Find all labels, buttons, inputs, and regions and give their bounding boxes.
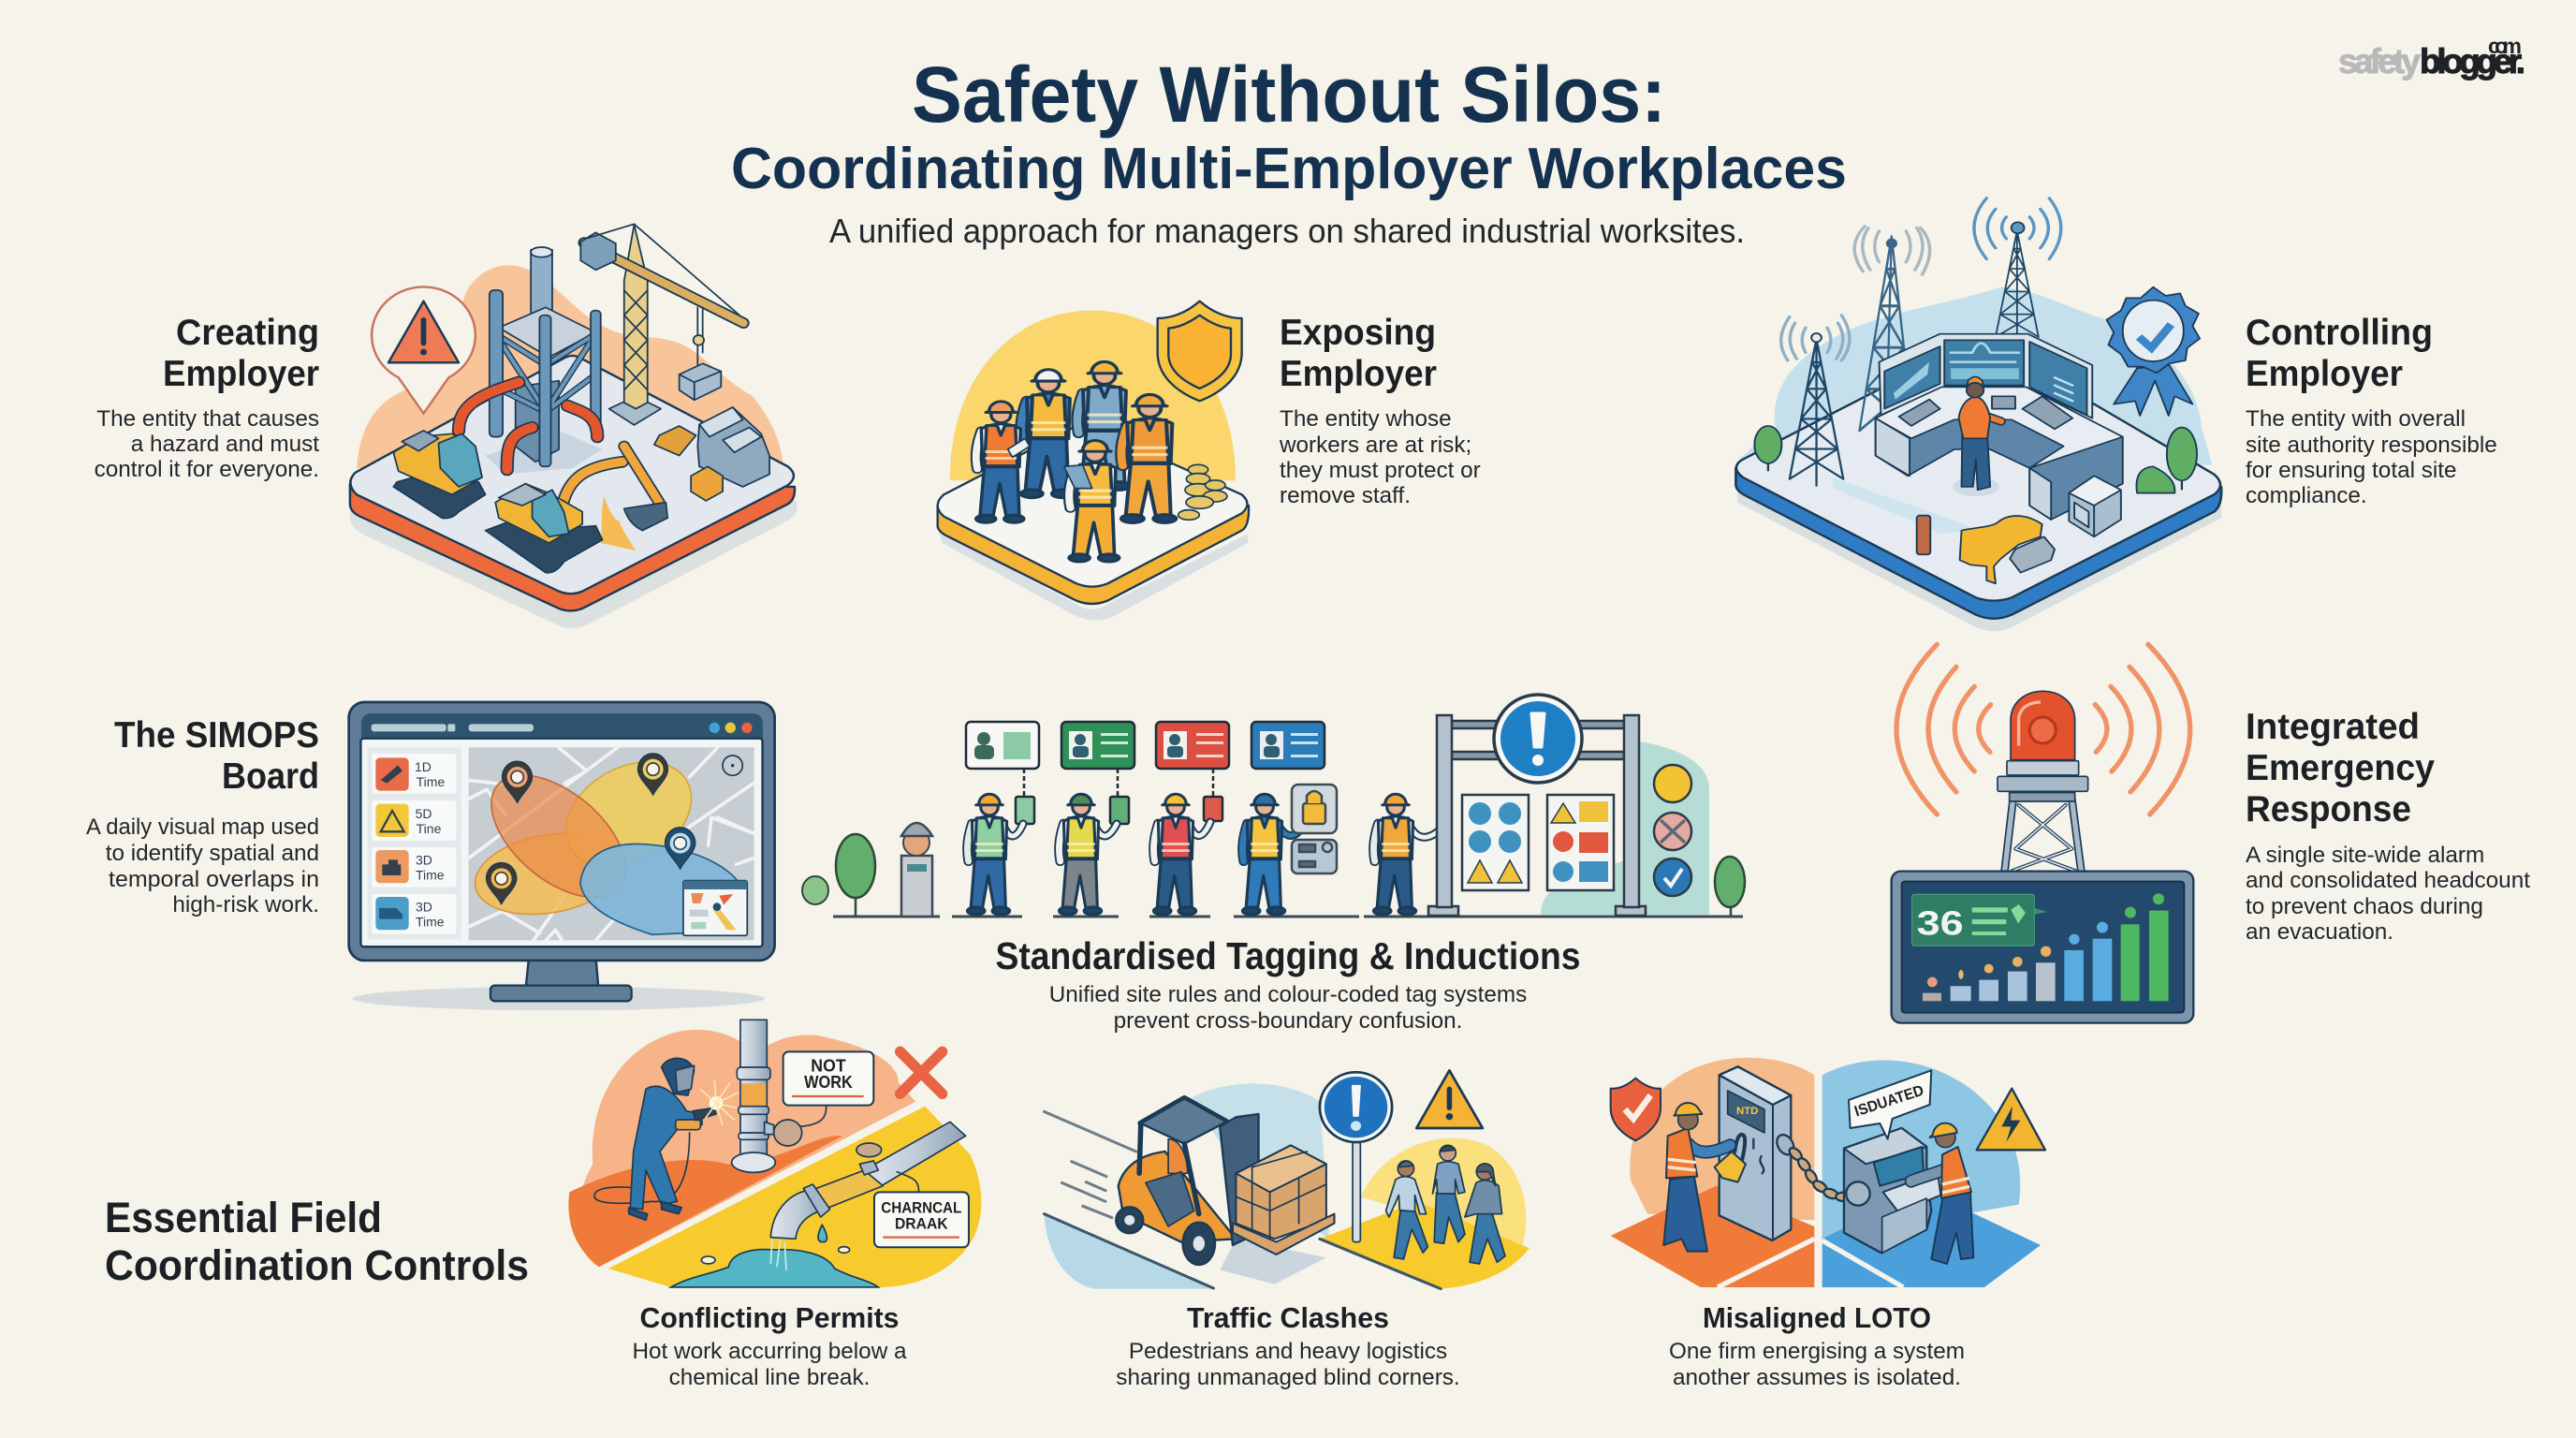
text: controlling employer description: site authority responsible <box>2246 433 2497 458</box>
yellow backdrop <box>950 311 1236 480</box>
logo: blogger. <box>2420 42 2525 81</box>
text: controlling employer description: The entity with overall <box>2246 406 2466 432</box>
sign: not work: WORK <box>804 1072 853 1092</box>
text: creating employer description: The entity that causes <box>96 406 319 432</box>
siren head <box>1998 691 2088 791</box>
heading: exposing employer <box>1280 313 1437 394</box>
red pipes <box>459 382 597 470</box>
side badges <box>1654 765 1691 896</box>
heading: creating employer: Employer <box>163 354 319 394</box>
heading: SIMOPS board: Board <box>222 756 319 797</box>
vertical pipe <box>732 1020 827 1172</box>
equipment cabinet <box>2069 476 2121 536</box>
heading: creating employer: Creating <box>176 313 319 353</box>
blue backdrop <box>1739 287 2212 465</box>
padlock and device cards <box>1292 785 1337 873</box>
platform <box>350 356 798 628</box>
text: misaligned LOTO description: another assumes is isolated. <box>1673 1365 1961 1390</box>
inset mini map <box>683 881 747 935</box>
sign: isolated <box>1849 1070 1931 1139</box>
sidebar list: Time <box>417 774 445 789</box>
leaking chemical pipe <box>671 1122 966 1287</box>
extinguisher and yellow tarp <box>1917 516 2055 583</box>
logo: com <box>2488 34 2522 58</box>
heading: exposing employer: Employer <box>1280 354 1437 394</box>
radio towers <box>1790 222 2039 486</box>
title: Safety Without Silos: <box>912 51 1666 139</box>
sign: not work <box>783 1051 873 1106</box>
platform <box>938 425 1249 621</box>
workers row <box>967 794 1442 915</box>
operator <box>1953 376 2001 496</box>
control machine <box>1844 1128 1940 1253</box>
tower legs <box>2005 793 2081 871</box>
heading: essential field coordination controls <box>105 1194 529 1289</box>
induction gate <box>1428 715 1646 916</box>
icon: approval ribbon <box>2107 287 2200 416</box>
text: creating employer description: control it for everyone. <box>95 457 319 482</box>
stacked coins <box>1178 464 1227 520</box>
text: misaligned LOTO description: One firm energising a system <box>1669 1339 1965 1364</box>
teal sign backdrop <box>1541 741 1709 915</box>
text: emergency description: an evacuation. <box>2246 919 2393 945</box>
text: exposing employer description: The entity whose <box>1280 406 1452 432</box>
icon: shield <box>1158 301 1242 401</box>
text: SIMOPS description: to identify spatial and <box>106 841 319 866</box>
icon: info sign <box>1494 695 1582 783</box>
worker locking out <box>1663 1103 1730 1252</box>
text: SIMOPS description: high-risk work. <box>172 892 319 917</box>
icon: warning triangle <box>1416 1070 1483 1128</box>
headcount badge <box>1912 894 2047 946</box>
heading: traffic clashes: Traffic Clashes <box>1187 1301 1389 1334</box>
icon: red cross <box>900 1051 943 1093</box>
panel: misaligned LOTO illustration <box>1611 1058 2045 1287</box>
heading: integrated emergency response: Response <box>2246 789 2411 829</box>
heading: SIMOPS board <box>114 715 319 797</box>
sign: not work: NOT <box>811 1056 846 1076</box>
text: controlling employer description: compliance. <box>2246 483 2367 508</box>
welder <box>594 1058 716 1220</box>
text: emergency description: to prevent chaos during <box>2246 894 2483 919</box>
headcount badge: 36 <box>1917 903 1964 942</box>
subtitle: A unified approach for managers on shared industrial worksites. <box>829 212 1745 250</box>
sound waves <box>1896 644 2190 814</box>
heading: standardised tagging: Standardised Tagging & Inductions <box>996 934 1580 977</box>
title <box>731 51 1847 201</box>
text: emergency description: and consolidated headcount <box>2246 868 2530 893</box>
weld sparks <box>700 1079 739 1125</box>
heading: controlling employer: Employer <box>2246 354 2403 394</box>
title: Coordinating Multi-Employer Workplaces <box>731 137 1847 201</box>
sign: chemical break: DRAAK <box>895 1214 948 1232</box>
sign: chemical break <box>874 1192 969 1247</box>
icon: electrical warning <box>1977 1089 2045 1150</box>
panel: conflicting permits illustration <box>568 1020 981 1287</box>
text: controlling employer description: for ensuring total site <box>2246 458 2457 483</box>
text: conflicting permits description: Hot work accurring below a <box>632 1339 907 1364</box>
heading: SIMOPS board: The SIMOPS <box>114 715 319 756</box>
icon: shield check <box>1611 1078 1661 1140</box>
backdrops <box>1044 1083 1530 1289</box>
heading: controlling employer <box>2246 313 2433 394</box>
trees <box>1754 426 2197 493</box>
text: creating employer description <box>95 406 319 482</box>
safety notice boards <box>1462 795 1614 890</box>
text: traffic clashes description: sharing unmanaged blind corners. <box>1116 1365 1460 1390</box>
text: traffic clashes description <box>1116 1339 1460 1390</box>
logo: safety <box>2338 42 2421 81</box>
text: tagging description: prevent cross-boundary confusion. <box>1114 1008 1462 1034</box>
heading: misaligned LOTO: Misaligned LOTO <box>1703 1301 1931 1334</box>
ID cards <box>966 722 1325 824</box>
text: controlling employer description <box>2246 406 2497 508</box>
text: SIMOPS description: temporal overlaps in <box>109 867 319 892</box>
text: creating employer description: a hazard and must <box>131 432 319 457</box>
forklift <box>1116 1098 1259 1265</box>
panel: tagging and inductions illustration <box>802 695 1745 917</box>
sidebar list: Time <box>416 914 445 929</box>
panel: exposing employer illustration <box>938 301 1249 621</box>
text: traffic clashes description: Pedestrians and heavy logistics <box>1129 1339 1447 1364</box>
sidebar list: 1D <box>415 759 432 774</box>
text: exposing employer description <box>1279 406 1481 508</box>
chain link <box>1774 1132 1870 1206</box>
trees and turnstile <box>802 823 1745 917</box>
panel: controlling employer illustration <box>1735 198 2221 631</box>
sign: chemical break: CHARNCAL <box>881 1199 961 1217</box>
road lines <box>1044 1111 1441 1289</box>
workers group <box>976 361 1176 562</box>
heading: integrated emergency response: Integrated <box>2246 707 2420 747</box>
text: exposing employer description: workers are at risk; <box>1279 433 1471 458</box>
material blocks <box>654 407 769 501</box>
panel: SIMOPS monitor illustration <box>349 702 775 1010</box>
switch cabinet: NTD <box>1736 1106 1758 1117</box>
ground lines <box>833 916 1743 917</box>
heading: exposing employer: Exposing <box>1280 313 1436 353</box>
orange backdrop <box>357 265 783 468</box>
icon: info signpost <box>1320 1072 1392 1242</box>
map pins <box>487 754 742 904</box>
heading: essential field coordination controls: Essential Field <box>105 1194 382 1241</box>
logo <box>2338 34 2525 81</box>
padlock <box>1715 1135 1746 1182</box>
panel: creating employer illustration <box>350 224 798 628</box>
switch cabinet <box>1720 1066 1791 1240</box>
coloured backdrops <box>1611 1058 2041 1287</box>
text: misaligned LOTO description <box>1669 1339 1965 1390</box>
sidebar list <box>368 747 461 939</box>
radio waves <box>1781 198 2061 360</box>
heading: controlling employer: Controlling <box>2246 313 2433 353</box>
sidebar list: 3D <box>416 852 432 867</box>
text: tagging description <box>1049 982 1527 1034</box>
sidebar list: 3D <box>416 899 432 914</box>
pedestrians <box>1386 1145 1505 1264</box>
text: exposing employer description: remove staff. <box>1280 483 1411 508</box>
text: conflicting permits description: chemical line break. <box>669 1365 870 1390</box>
control desk with monitors <box>1876 334 2123 520</box>
map with overlap zones <box>469 741 754 940</box>
platform <box>1735 341 2221 631</box>
text: SIMOPS description: A daily visual map used <box>86 814 319 840</box>
sidebar list: 5D <box>416 806 432 821</box>
steel tower <box>490 247 601 466</box>
bar chart <box>1923 893 2169 1001</box>
worker at controls <box>1911 1123 1973 1264</box>
crane <box>580 224 743 425</box>
text: exposing employer description: they must protect or <box>1280 458 1481 483</box>
sidebar list: Tine <box>417 821 442 836</box>
sidebar list: Time <box>416 867 445 882</box>
text: conflicting permits description <box>632 1339 907 1390</box>
dashboard screen <box>1892 872 2193 1023</box>
monitor stand <box>353 958 765 1010</box>
excavator left <box>393 431 486 519</box>
icon: hazard speech bubble <box>372 286 476 414</box>
heading: integrated emergency response <box>2246 707 2435 829</box>
panel: emergency beacon illustration <box>1892 644 2193 1023</box>
excavator right <box>486 447 667 573</box>
heading: conflicting permits: Conflicting Permits <box>640 1301 899 1334</box>
sign: isolated: ISDUATED <box>1852 1082 1926 1120</box>
heading: essential field coordination controls: Coordination Controls <box>105 1241 529 1289</box>
heading: creating employer <box>163 313 319 394</box>
coloured backdrops <box>568 1030 981 1287</box>
text: emergency description <box>2246 843 2530 945</box>
pallet boxes <box>1233 1145 1334 1255</box>
text: emergency description: A single site-wide alarm <box>2246 843 2484 868</box>
monitor bezel <box>349 702 775 961</box>
text: tagging description: Unified site rules and colour-coded tag systems <box>1049 982 1527 1007</box>
text: SIMOPS description <box>86 814 319 917</box>
heading: integrated emergency response: Emergency <box>2246 748 2435 788</box>
panel: traffic clashes illustration <box>1044 1070 1530 1289</box>
